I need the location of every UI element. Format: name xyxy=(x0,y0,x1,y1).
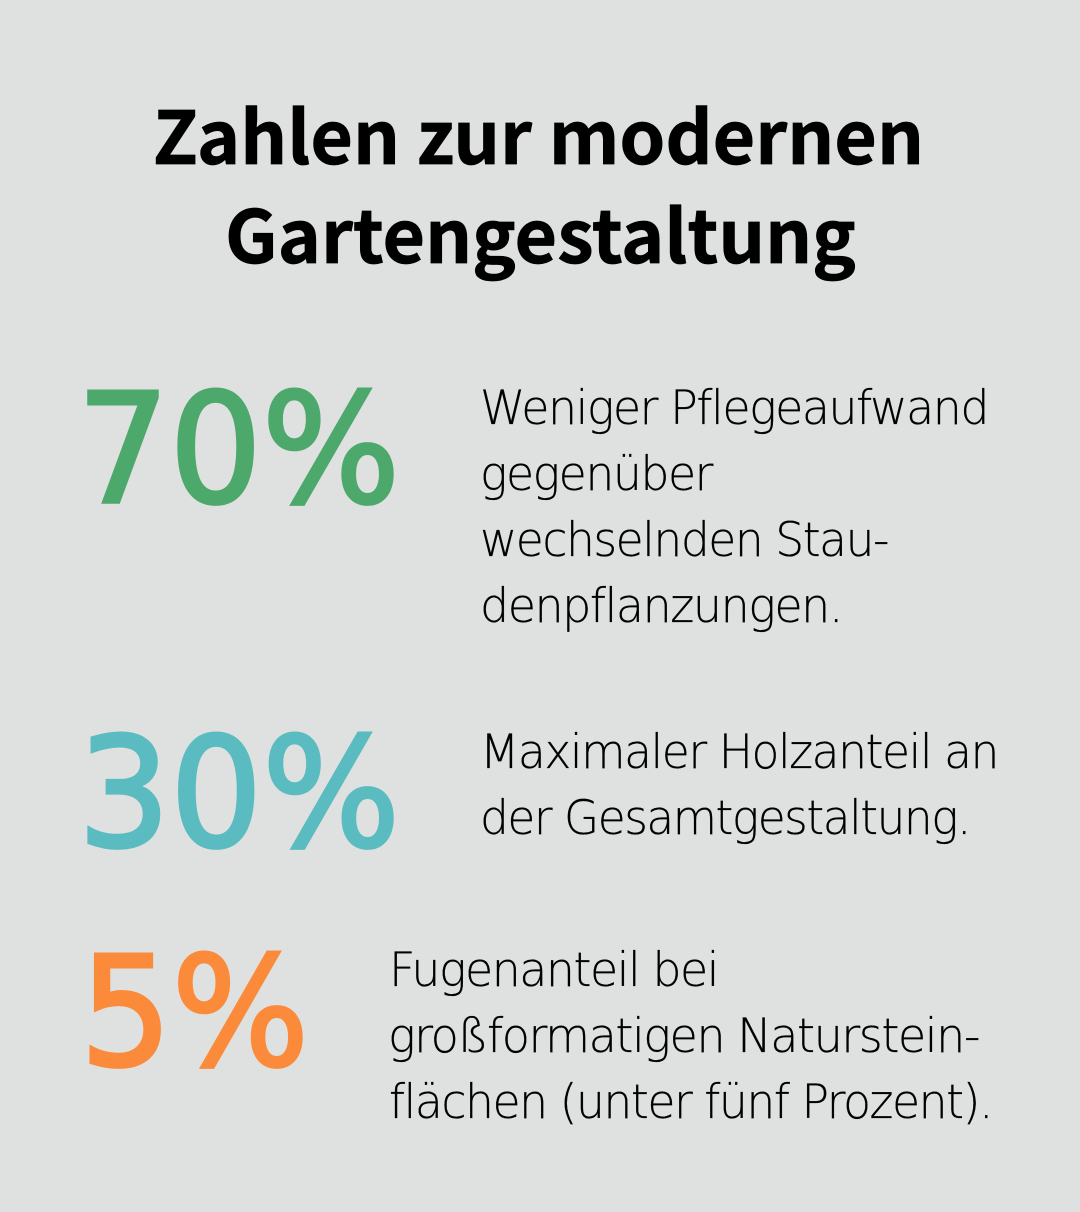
title xyxy=(153,80,924,285)
description: 5%: großformatigen Naturstein- xyxy=(388,1009,979,1064)
number: 30%: 30% xyxy=(78,705,400,882)
statistic: 30% xyxy=(78,705,998,882)
description: 30%: der Gesamtgestaltung. xyxy=(480,791,970,846)
description: 70%: gegenüber xyxy=(480,447,714,502)
description: 5%: flächen (unter fünf Prozent). xyxy=(389,1075,992,1130)
statistic: 5% xyxy=(80,924,992,1130)
title: Gartengestaltung xyxy=(225,179,856,285)
description: 30% xyxy=(480,725,998,846)
description: 30%: Maximaler Holzanteil an xyxy=(480,725,998,780)
description: 70%: Weniger Pflegeaufwand xyxy=(480,381,988,436)
description: 70%: denpflanzungen. xyxy=(480,579,842,634)
description: 70% xyxy=(480,381,988,634)
number: 70%: 70% xyxy=(77,361,400,538)
title: Zahlen zur modernen xyxy=(153,80,924,186)
description: 70%: wechselnden Stau- xyxy=(480,513,888,568)
description: 5%: Fugenanteil bei xyxy=(389,943,718,998)
description: 5% xyxy=(388,943,992,1130)
number: 5%: 5% xyxy=(80,924,309,1101)
statistic: 70% xyxy=(77,361,988,634)
